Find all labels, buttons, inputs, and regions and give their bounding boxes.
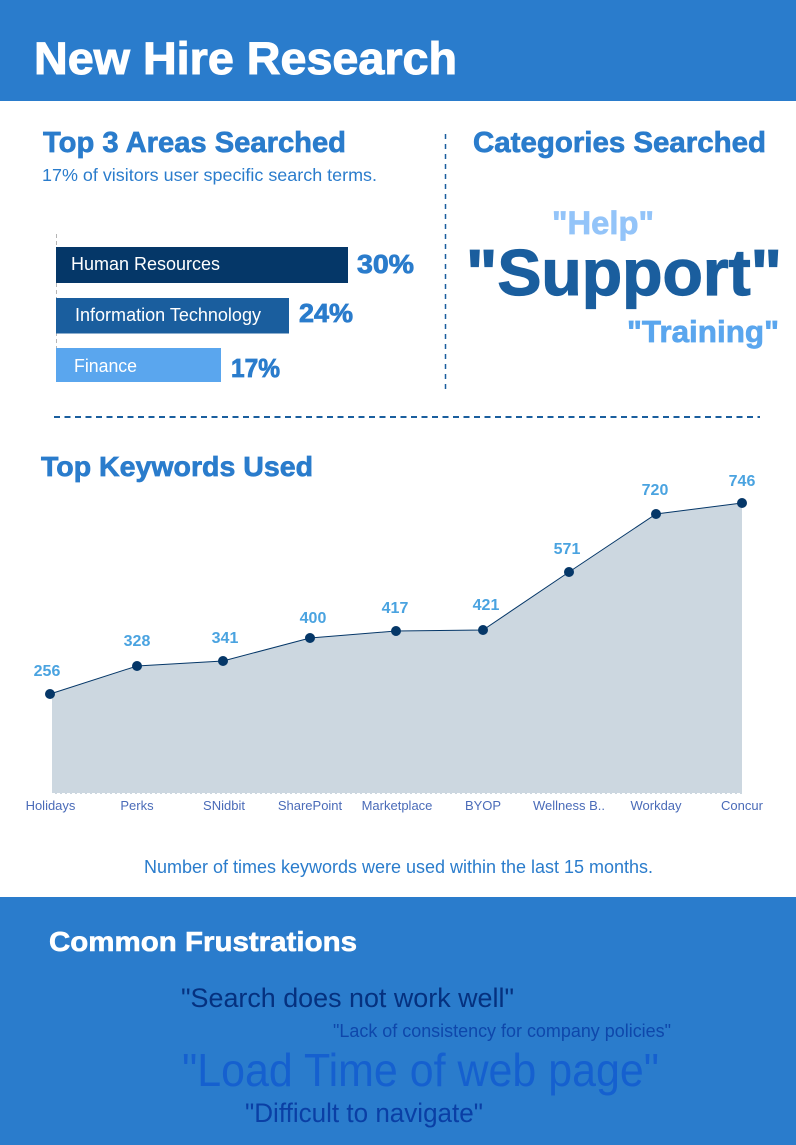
heading: categories: Categories Searched (473, 127, 766, 159)
bar: finance: Finance (74, 356, 137, 376)
axis labels: SharePoint (278, 798, 343, 813)
data values: 328 (124, 633, 150, 650)
bar: human resources: 30% (357, 249, 414, 279)
axis labels: BYOP (465, 798, 501, 813)
bar: information technology: 24% (299, 298, 353, 328)
data values: 720 (642, 482, 668, 499)
quote: navigate: "Difficult to navigate" (245, 1098, 483, 1128)
title: New Hire Research (34, 33, 457, 84)
quote: search: "Search does not work well" (181, 983, 514, 1013)
data values: 417 (382, 600, 408, 617)
axis labels: Marketplace (362, 798, 432, 813)
axis labels: Concur (721, 798, 764, 813)
axis labels: SNidbit (203, 798, 245, 813)
data values: 421 (473, 597, 499, 614)
subheading text: 17% of visitors user specific search terms. (42, 165, 377, 185)
header banner (0, 0, 796, 101)
panel: categories searched (466, 127, 782, 349)
data values: 571 (554, 541, 580, 558)
quote: consistency: "Lack of consistency for company policies" (333, 1021, 671, 1041)
heading: top 3 areas: Top 3 Areas Searched (43, 127, 346, 159)
panel: top 3 areas searched (42, 127, 414, 383)
axis labels: Perks (120, 798, 154, 813)
heading: common frustrations: Common Frustrations (49, 926, 357, 957)
data values: 256 (34, 663, 60, 680)
bar: human resources (56, 247, 414, 283)
word: training: "Training" (627, 314, 779, 349)
bar: information technology: Information Technology (75, 305, 261, 325)
axis labels: Workday (630, 798, 682, 813)
word: support: "Support" (466, 236, 782, 309)
data values: 400 (300, 610, 326, 627)
axis labels (26, 798, 764, 813)
bar: human resources: Human Resources (71, 254, 220, 274)
bar: finance: 17% (231, 353, 280, 383)
area chart: keywords (26, 473, 764, 813)
chart caption: Number of times keywords were used within the last 15 months. (144, 857, 653, 877)
bar: finance (56, 348, 280, 383)
data values: 341 (212, 630, 238, 647)
panel: common frustrations (0, 897, 796, 1145)
axis labels: Wellness B.. (533, 798, 605, 813)
data points (45, 498, 747, 699)
quote: load time: "Load Time of web page" (182, 1044, 659, 1096)
word: help: "Help" (552, 205, 654, 241)
data values: 746 (729, 473, 755, 490)
bar: information technology (56, 298, 353, 334)
data values (34, 473, 755, 680)
heading: top keywords: Top Keywords Used (41, 451, 313, 482)
panel: top keywords used (26, 451, 764, 877)
bar chart: areas (56, 234, 414, 383)
axis labels: Holidays (26, 798, 76, 813)
